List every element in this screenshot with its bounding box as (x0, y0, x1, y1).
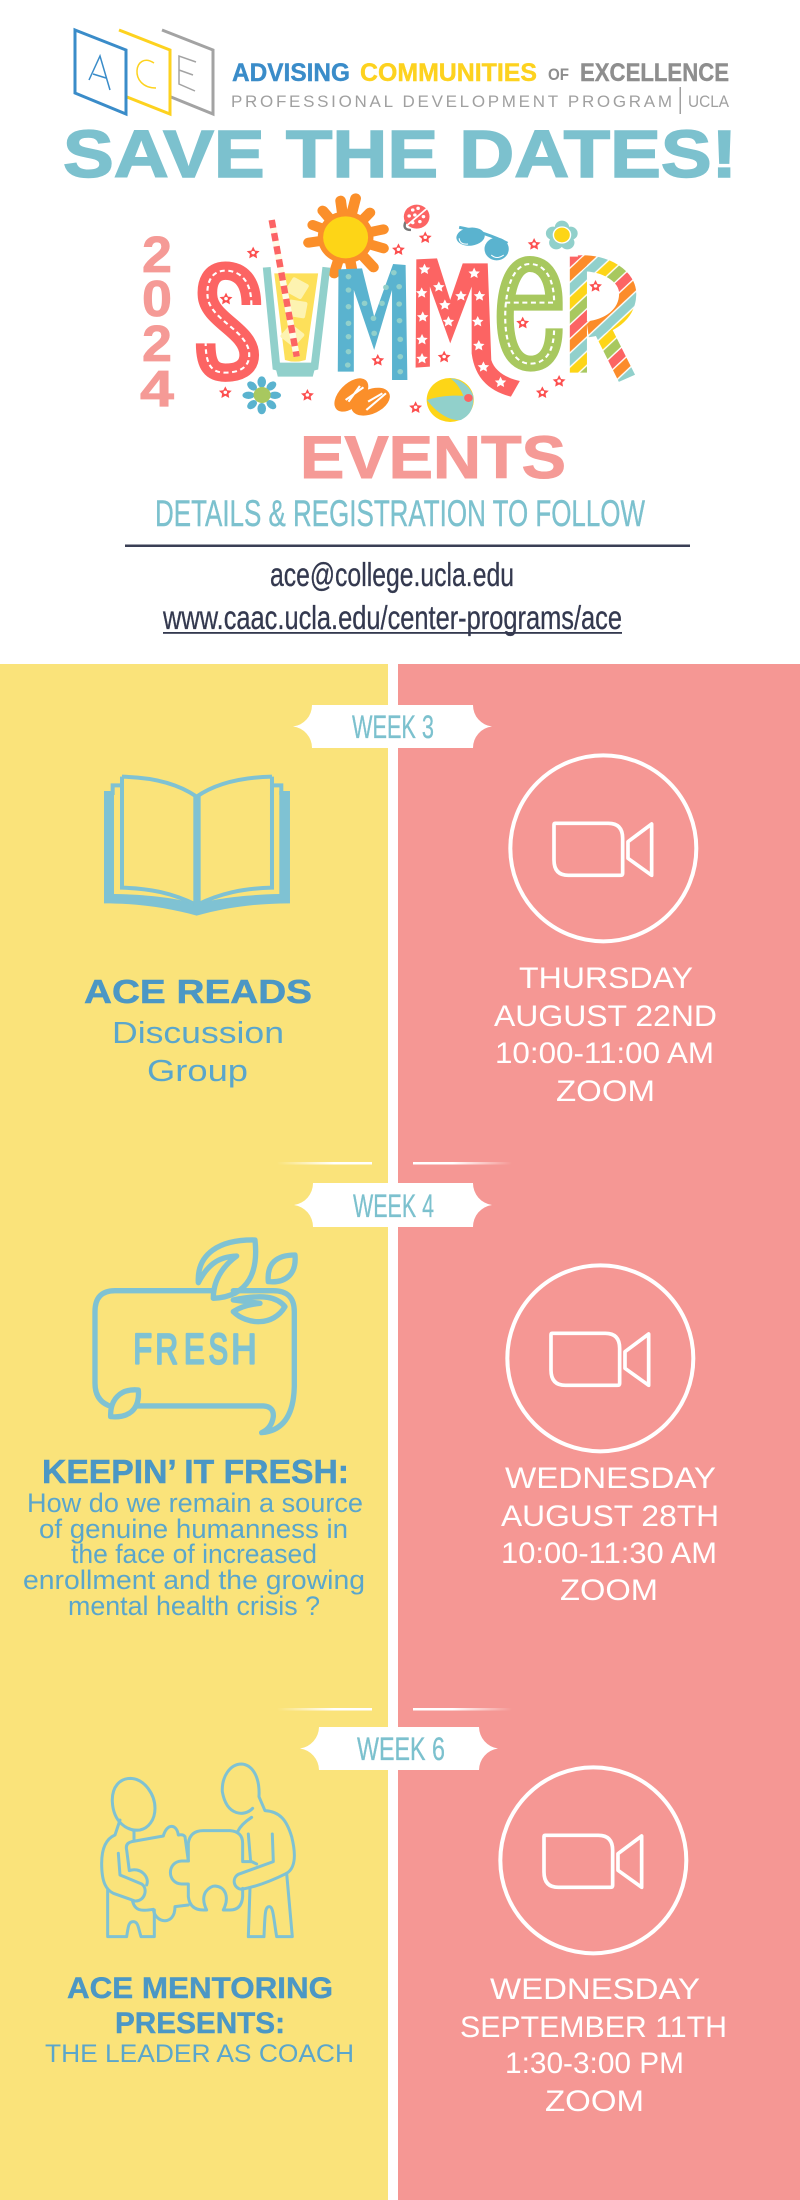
summer illustration (206, 198, 628, 422)
schedule: week 6 (460, 1973, 727, 2118)
schedule: week 6: 1:30-3:00 PM (505, 2047, 684, 2080)
schedule: week 4: AUGUST 28TH (501, 1500, 719, 1533)
schedule: week 3: THURSDAY (519, 962, 693, 995)
letter: E green (505, 264, 554, 364)
icon: fresh speech bubble: F (133, 1326, 152, 1374)
event: ACE mentoring (45, 1972, 354, 2068)
letter: U glass (267, 220, 326, 377)
event: ACE reads: Discussion (112, 1015, 284, 1050)
event: ACE mentoring: PRESENTS: (115, 2007, 285, 2040)
event: keepin it fresh: of genuine humanness in (39, 1514, 348, 1544)
year 2024 vertical: 2 (142, 226, 172, 283)
icon: open book (104, 777, 290, 916)
schedule: week 4 (501, 1462, 719, 1607)
logo wordmark: COMMUNITIES (360, 59, 537, 87)
icon: ladybug (404, 205, 430, 230)
tag: week 4: WEEK 4 (353, 1188, 434, 1224)
icon: fresh speech bubble: E (184, 1326, 205, 1374)
heading: events: EVENTS (300, 424, 566, 491)
icon: teal flower (546, 221, 578, 249)
letter: R striped (578, 257, 628, 378)
schedule: week 4: 10:00-11:30 AM (501, 1537, 717, 1570)
tag: week 3 (293, 705, 492, 748)
icon: sunglasses (455, 226, 509, 260)
icon: fresh speech bubble (95, 1240, 295, 1433)
contact email: ace@college.ucla.edu (270, 556, 514, 593)
logo wordmark: EXCELLENCE (580, 59, 729, 87)
letter: M blue (338, 264, 407, 380)
schedule: week 4: ZOOM (560, 1574, 658, 1607)
schedule: week 3 (494, 962, 717, 1108)
logo wordmark (231, 59, 730, 114)
event: ACE reads: Group (147, 1053, 248, 1088)
schedule: week 3: ZOOM (556, 1075, 655, 1108)
logo wordmark: PROFESSIONAL DEVELOPMENT PROGRAM (231, 92, 672, 111)
event: ACE reads: ACE READS (84, 973, 312, 1010)
icon: red stars (219, 231, 602, 413)
schedule: week 3: AUGUST 22ND (494, 1000, 717, 1033)
icon: zoom camera week 4 (507, 1265, 693, 1451)
tag: week 3: WEEK 3 (352, 709, 434, 745)
event: keepin it fresh: KEEPIN’ IT FRESH: (42, 1453, 349, 1490)
panel: pink column (398, 664, 800, 2200)
year 2024 vertical (140, 226, 175, 417)
event: ACE mentoring: ACE MENTORING (67, 1972, 333, 2005)
contact website: www.caac.ucla.edu/center-programs/ace (162, 599, 622, 636)
icon: flip flops (328, 373, 395, 421)
icon: two people with puzzle (102, 1764, 294, 1937)
title: save the dates: SAVE THE DATES! (63, 117, 737, 192)
year 2024 vertical: 0 (142, 270, 172, 327)
event: ACE mentoring: THE LEADER AS COACH (45, 2040, 354, 2068)
schedule: week 6: SEPTEMBER 11TH (460, 2011, 727, 2044)
icon: fresh speech bubble: S (209, 1326, 228, 1374)
schedule: week 6: WEDNESDAY (490, 1973, 700, 2006)
logo wordmark: ADVISING (232, 59, 350, 87)
schedule: week 3: 10:00-11:00 AM (495, 1037, 714, 1070)
icon: beach ball (427, 378, 474, 422)
tag: week 4 (294, 1183, 492, 1227)
letter: M red (416, 258, 520, 397)
icon: zoom camera week 6 (500, 1767, 686, 1953)
event: keepin it fresh (23, 1453, 365, 1621)
icon: fresh speech bubble: R (155, 1326, 178, 1374)
schedule: week 6: ZOOM (545, 2085, 644, 2118)
icon: ACE cubes (75, 30, 213, 114)
icon: zoom camera week 3 (510, 755, 696, 941)
tag: week 6 (300, 1727, 498, 1770)
logo: ACE Advising Communities of Excellence (75, 30, 730, 114)
event: ACE reads (84, 973, 312, 1088)
event: keepin it fresh: How do we remain a source (27, 1488, 363, 1518)
schedule: week 4: WEDNESDAY (505, 1462, 716, 1495)
panel: yellow column (0, 664, 388, 2200)
event: keepin it fresh: enrollment and the growing (23, 1565, 365, 1595)
year 2024 vertical: 2 (142, 315, 172, 372)
icon: blue flower (242, 376, 281, 414)
year 2024 vertical: 4 (140, 360, 175, 417)
letter: S (206, 271, 251, 373)
logo wordmark: UCLA (688, 92, 730, 111)
logo wordmark: OF (548, 65, 569, 84)
event: keepin it fresh: mental health crisis ? (68, 1591, 320, 1621)
icon: sun (308, 198, 383, 273)
icon: fresh speech bubble: H (231, 1326, 257, 1374)
tag: week 6: WEEK 6 (357, 1731, 445, 1767)
event: keepin it fresh: the face of increased (71, 1539, 317, 1569)
